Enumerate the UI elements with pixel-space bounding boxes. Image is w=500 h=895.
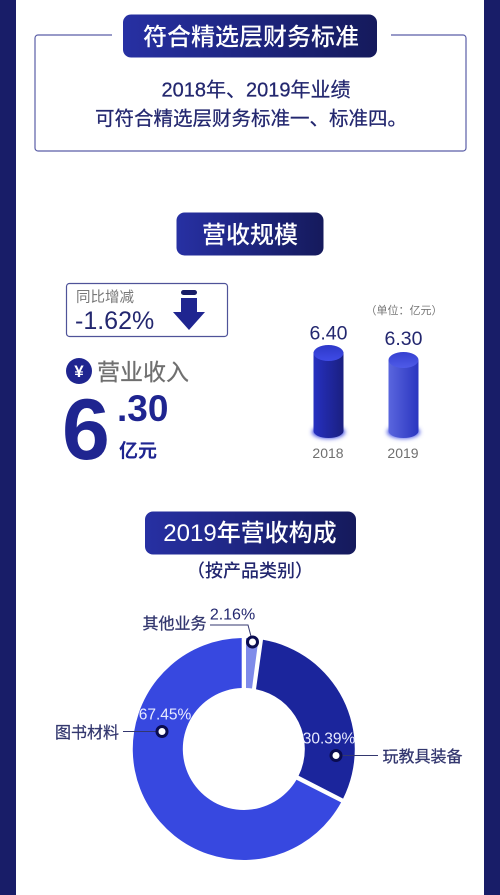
right side border [484,0,500,895]
slice: other 2.16% [246,638,258,688]
bar chart: revenue [310,303,442,461]
label: operating revenue: 营业收入 [97,359,189,385]
bar 2018: 6.40 [310,322,348,344]
subheading: by product category: （按产品类别） [187,561,313,581]
bar 2018 [310,322,348,461]
label: toys: 30.39% [303,730,355,748]
label: other [142,606,258,647]
donut chart [55,606,463,860]
label: books: 67.45% [139,706,191,724]
label: other: 2.16% [210,606,255,624]
heading: financial standard [123,14,377,58]
label: other: 其他业务 [142,615,207,633]
heading: 2019 revenue composition [145,512,356,554]
left side border [0,0,16,895]
heading: revenue scale: 营收规模 [202,222,298,249]
unit note: （单位：亿元） [366,303,442,317]
label: toys: 玩教具装备 [382,748,463,766]
panel: year on year change: 同比增减 [76,289,134,306]
label: books [55,706,191,742]
label: toys [303,730,463,766]
revenue value: 亿元 [119,440,157,462]
label: books: 图书材料 [55,724,119,742]
heading: 2019 revenue composition: 2019年营收构成 [163,520,337,547]
slice: books 67.45% [133,638,341,860]
icon: yen coin: ¥ [74,362,84,381]
text block: standard description: 可符合精选层财务标准一、标准四。 [95,108,407,130]
revenue value: 6 [62,382,110,478]
revenue value [62,382,168,478]
panel: year on year change: -1.62% [75,307,154,335]
bar 2019: 2019 [387,445,419,461]
icon: yen coin [66,358,92,384]
revenue value: .30 [117,388,168,429]
bar 2018: 2018 [312,445,344,461]
panel: financial standard [35,14,466,151]
slice: toys 30.39% [256,640,355,799]
heading: financial standard: 符合精选层财务标准 [143,24,359,51]
icon: down arrow [173,290,205,330]
panel: year on year change [66,284,228,336]
heading: revenue scale [176,212,324,256]
bar 2019 [385,328,423,461]
text block: standard description: 2018年、2019年业绩 [162,78,350,102]
bar 2019: 6.30 [385,328,423,350]
text block: standard description [95,78,407,130]
